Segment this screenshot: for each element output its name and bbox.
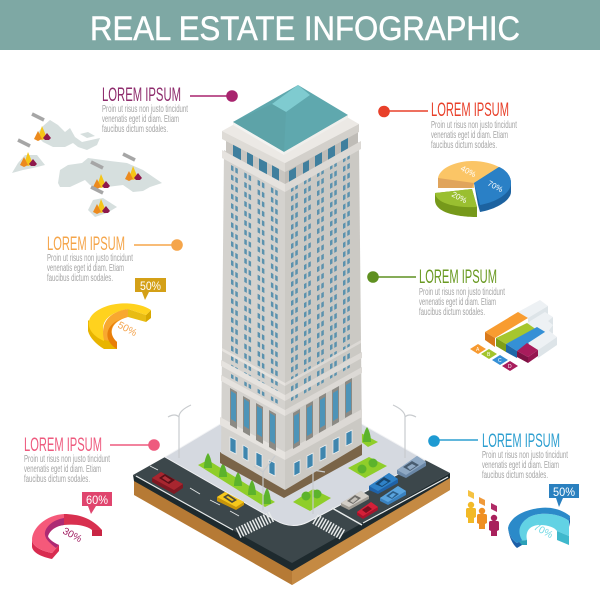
car: red [357, 502, 378, 519]
roof [233, 85, 348, 155]
connector: green [367, 271, 416, 283]
text block: purple: Proin ut risus non justo tincidunt [102, 104, 188, 115]
panel: pie chart section [378, 100, 517, 217]
illustration: street lamps [168, 405, 416, 514]
brown foundation [220, 443, 362, 498]
text block: blue [482, 450, 568, 481]
text block: green [419, 287, 505, 318]
panel: bar chart section [367, 267, 557, 371]
pie chart: 40% [459, 164, 477, 179]
soil side [134, 474, 450, 585]
map marker 3 [91, 162, 110, 189]
legend tags: C [498, 358, 502, 364]
text block: pink: venenatis eget id diam. Etiam [24, 464, 101, 475]
text block: red: Proin ut risus non justo tincidunt [431, 120, 517, 131]
left window grid [232, 166, 276, 403]
title banner [0, 0, 600, 50]
pie chart [435, 161, 511, 217]
connector: orange [134, 239, 183, 251]
text block: pink [24, 454, 110, 485]
text block: red: faucibus dictum sodales. [431, 140, 497, 151]
legend tags [470, 344, 518, 371]
text block: red [431, 120, 517, 151]
text block: pink: Proin ut risus non justo tincidunt [24, 454, 110, 465]
donut chart: blue [508, 508, 570, 548]
callout: 50% [549, 484, 579, 507]
car: light blue [380, 486, 406, 505]
text block: blue: faucibus dictum sodales. [482, 470, 548, 481]
text block: green: faucibus dictum sodales. [419, 307, 485, 318]
text block: pink: faucibus dictum sodales. [24, 474, 90, 485]
trees [204, 427, 378, 504]
illustration: office tower [220, 85, 362, 498]
illustration: cars [152, 456, 426, 519]
connector: red [378, 106, 428, 117]
road base edge [133, 473, 450, 571]
connector: purple [190, 90, 238, 102]
donut chart: pink: 30% [61, 526, 84, 545]
map marker 5 [91, 187, 110, 214]
text block: purple [102, 104, 188, 135]
panel: world map section [12, 85, 238, 217]
heading: purple: LOREM IPSUM [102, 85, 181, 106]
world map [12, 120, 162, 217]
bar chart [485, 300, 557, 363]
connector: blue [428, 435, 478, 447]
connector: pink [110, 439, 160, 451]
text block: orange: venenatis eget id diam. Etiam [47, 263, 124, 274]
text block: red: venenatis eget id diam. Etiam [431, 130, 508, 141]
map marker 4 [123, 154, 142, 181]
legend tags: A [476, 347, 480, 353]
text block: purple: venenatis eget id diam. Etiam [102, 114, 179, 125]
road markings [136, 466, 448, 535]
heading: pink: LOREM IPSUM [24, 435, 102, 456]
tall window glass [231, 382, 351, 444]
text block: green: Proin ut risus non justo tincidunt [419, 287, 505, 298]
heading: orange: LOREM IPSUM [47, 234, 125, 255]
people icons [466, 490, 499, 536]
heading: red: LOREM IPSUM [431, 100, 509, 121]
callout: 60%: 60% [86, 493, 108, 507]
car: yellow [217, 492, 244, 510]
map marker 2 [18, 140, 37, 167]
legend tags: D [508, 364, 512, 370]
car: grey blue [397, 456, 426, 478]
text block: orange: faucibus dictum sodales. [47, 273, 113, 284]
right wall [285, 142, 362, 490]
attic walls [226, 130, 358, 186]
donut chart: blue: 70% [532, 522, 555, 541]
attic windows [233, 137, 348, 184]
text block: green: venenatis eget id diam. Etiam [419, 297, 496, 308]
car: dark red [152, 472, 183, 494]
pie chart: 20% [450, 190, 468, 205]
car: blue [369, 473, 398, 494]
pie chart: 70% [486, 179, 504, 194]
text block: orange: Proin ut risus non justo tincidunt [47, 253, 133, 264]
map marker 1 [32, 114, 51, 141]
text block: orange [47, 253, 133, 284]
ledges [220, 141, 362, 460]
text block: purple: faucibus dictum sodales. [102, 124, 168, 135]
donut chart: yellow: 50% [116, 320, 139, 339]
right window grid [292, 154, 349, 404]
callout: 50%: 50% [140, 279, 161, 293]
heading: green: LOREM IPSUM [419, 267, 497, 288]
tall window frames [230, 378, 352, 451]
legend tags: B [487, 352, 491, 358]
panel: yellow donut section [47, 234, 183, 349]
cornice [222, 89, 359, 172]
pavement [165, 423, 425, 526]
hedge patches [198, 432, 387, 511]
panel: blue donut section [428, 431, 579, 548]
car: silver [341, 491, 369, 510]
callout: 50%: 50% [553, 485, 575, 499]
left wall [221, 150, 285, 490]
panel: pink donut section [24, 435, 160, 559]
illustration: city block ground [133, 423, 450, 585]
title: REAL ESTATE INFOGRAPHIC [90, 10, 520, 48]
plinth windows [230, 430, 352, 476]
asphalt road [133, 457, 450, 563]
